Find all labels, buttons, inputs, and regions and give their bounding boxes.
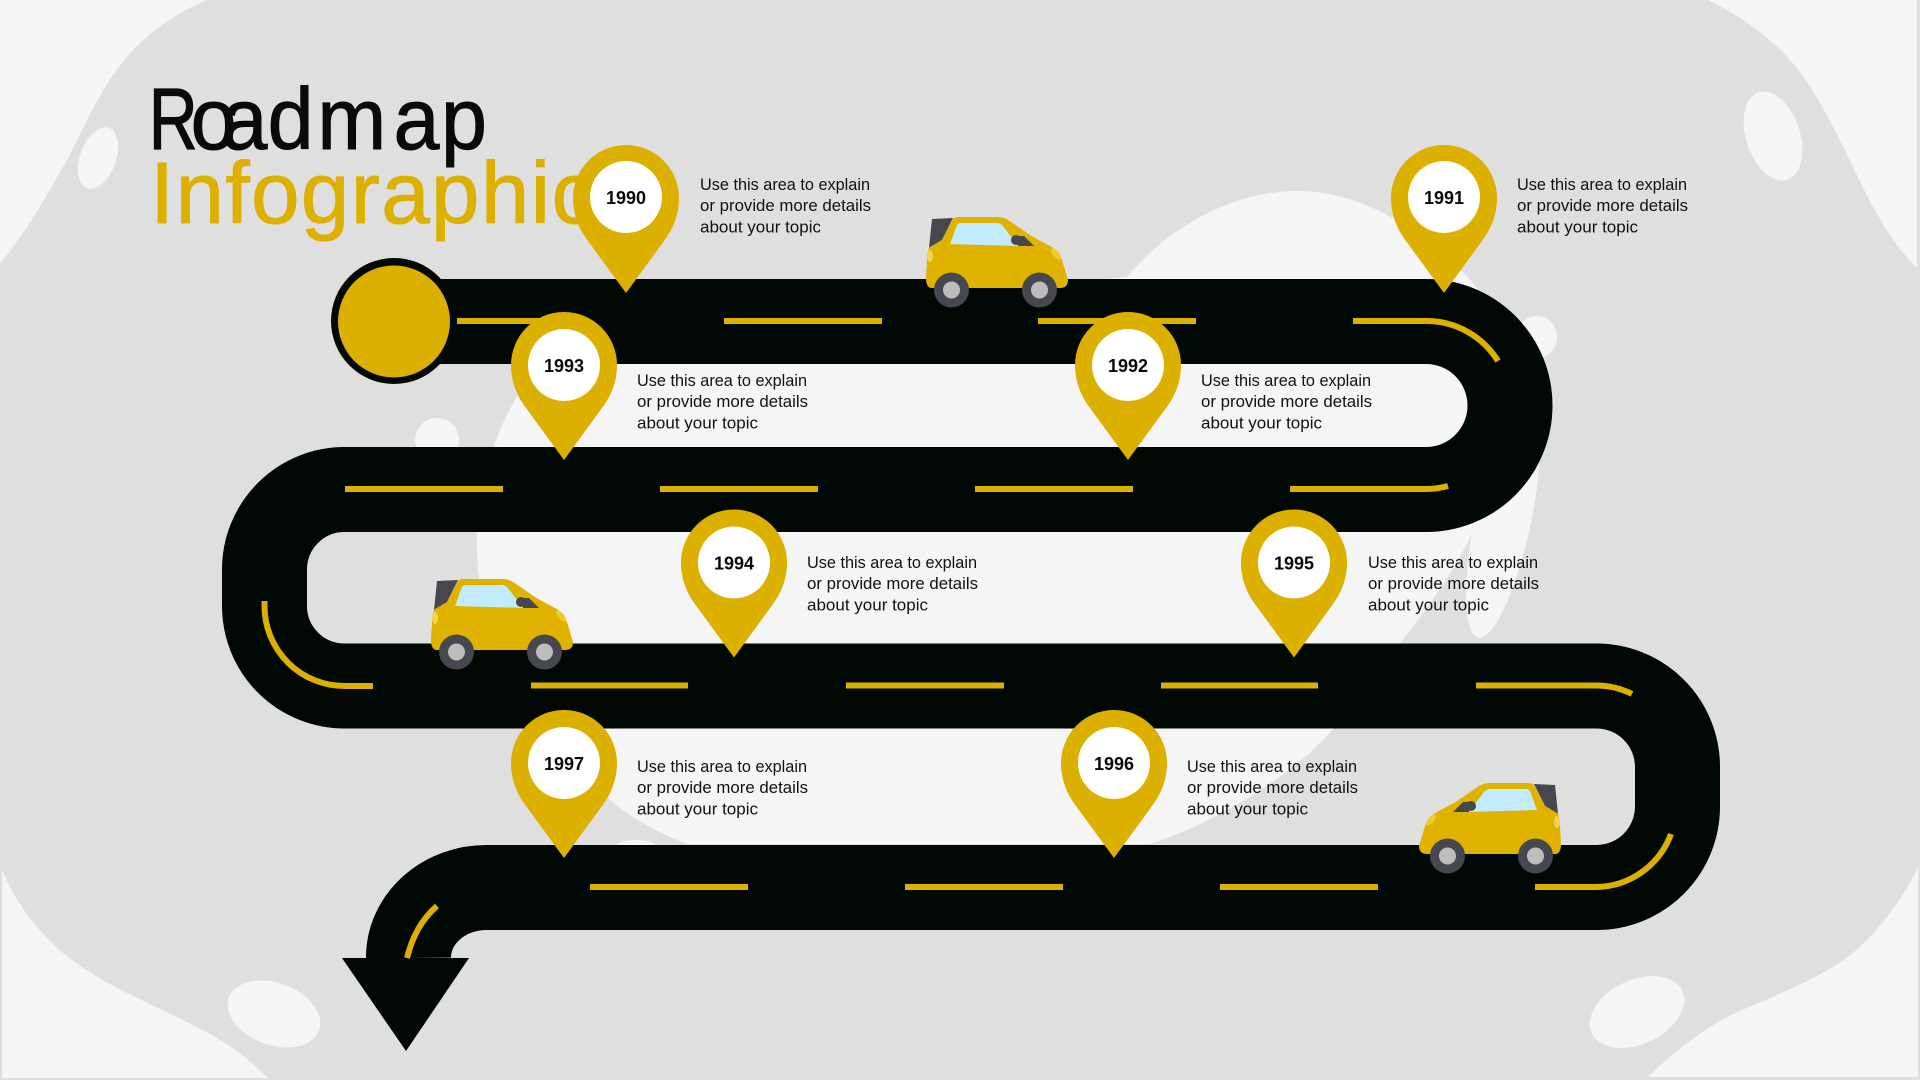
milestone 1993: Use this area to explain: [637, 371, 807, 390]
milestone 1994: [681, 510, 978, 658]
milestone 1992: 1992: [1108, 356, 1148, 376]
milestone 1996: or provide more details: [1187, 778, 1358, 797]
milestone 1993: about your topic: [637, 414, 758, 432]
milestone 1991: 1991: [1424, 188, 1464, 208]
milestone 1995: or provide more details: [1368, 574, 1539, 593]
milestone 1995: about your topic: [1368, 596, 1489, 614]
milestone 1995: [1241, 510, 1539, 658]
milestone 1996: Use this area to explain: [1187, 757, 1357, 776]
milestone 1995: 1995: [1274, 554, 1314, 574]
milestone 1990: about your topic: [700, 218, 821, 236]
car: middle road: [431, 579, 573, 670]
milestone 1991: about your topic: [1517, 218, 1638, 236]
milestone 1993: or provide more details: [637, 392, 808, 411]
milestone 1996: about your topic: [1187, 800, 1308, 818]
milestone 1996: 1996: [1094, 754, 1134, 774]
car: lower right road: [1419, 783, 1561, 874]
milestone 1997: about your topic: [637, 800, 758, 818]
milestone 1991: Use this area to explain: [1517, 175, 1687, 194]
milestone 1990: Use this area to explain: [700, 175, 870, 194]
title: [149, 70, 595, 242]
car: top road: [926, 217, 1068, 308]
milestone 1991: [1391, 145, 1688, 293]
milestone 1997: 1997: [544, 754, 584, 774]
milestone 1992: about your topic: [1201, 414, 1322, 432]
milestone 1990: [573, 145, 871, 293]
milestone 1991: or provide more details: [1517, 196, 1688, 215]
milestone 1990: 1990: [606, 188, 646, 208]
milestone 1997: or provide more details: [637, 778, 808, 797]
milestone 1993: [511, 312, 808, 460]
title: R: [149, 70, 198, 168]
road start marker: [331, 258, 457, 384]
title: oadmap: [191, 70, 487, 167]
title: Infographic: [150, 145, 595, 242]
milestone 1996: [1061, 710, 1358, 858]
milestone 1994: or provide more details: [807, 574, 978, 593]
milestone 1992: Use this area to explain: [1201, 371, 1371, 390]
milestone 1994: 1994: [714, 554, 754, 574]
milestone 1990: or provide more details: [700, 196, 871, 215]
milestone 1992: [1075, 312, 1372, 460]
milestone 1994: about your topic: [807, 596, 928, 614]
milestone 1997: Use this area to explain: [637, 757, 807, 776]
milestone 1995: Use this area to explain: [1368, 553, 1538, 572]
road: [264, 321, 1678, 1051]
milestone 1997: [511, 710, 808, 858]
milestone 1993: 1993: [544, 356, 584, 376]
milestone 1992: or provide more details: [1201, 392, 1372, 411]
milestone 1994: Use this area to explain: [807, 553, 977, 572]
